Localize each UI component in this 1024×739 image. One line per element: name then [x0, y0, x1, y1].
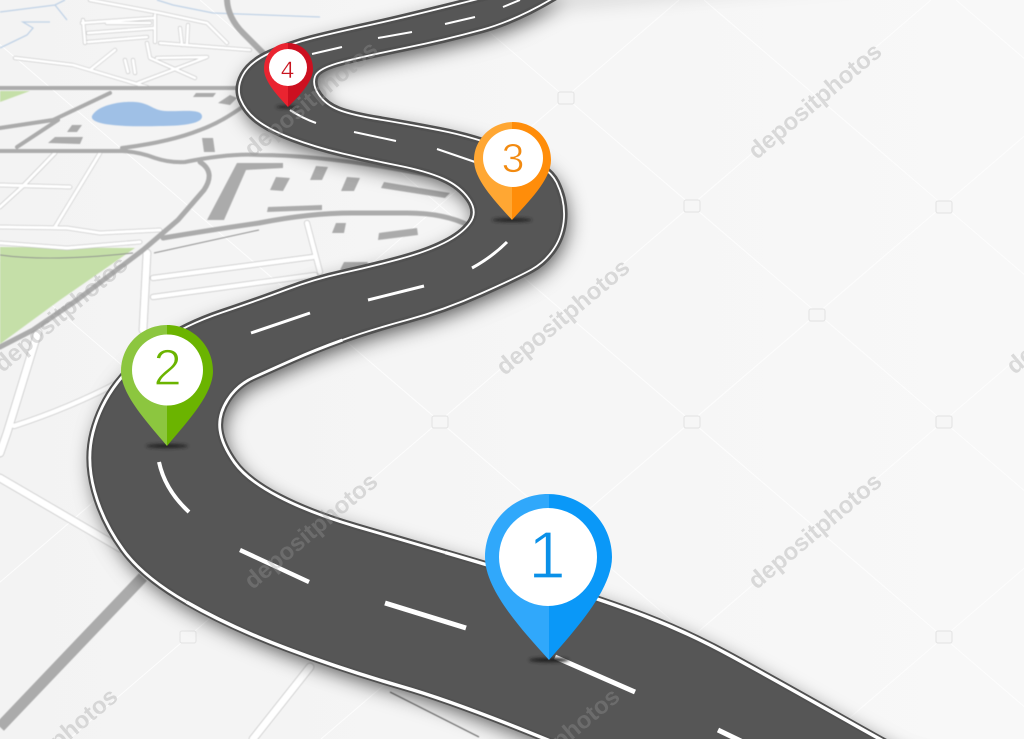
road white edge lines [90, 0, 900, 739]
pin 2 ground shadow [146, 444, 188, 448]
watermarks: depositphotos [239, 36, 383, 163]
pin 2 number: 2 [153, 339, 182, 396]
pin 3 ground shadow [492, 218, 532, 222]
pin 2 body [121, 325, 213, 446]
pin 1 body [485, 494, 612, 660]
pin 1 number: 1 [528, 518, 566, 593]
watermarks: depositphotos [491, 254, 635, 381]
watermarks: depositphotos [743, 468, 887, 595]
pin 1 number [499, 508, 597, 606]
watermarks: depositphotos [743, 38, 887, 165]
road centre dashes [159, 0, 745, 739]
pin 4 body [264, 43, 313, 107]
map: blue lake [92, 102, 202, 126]
watermarks: depositphotos [239, 468, 383, 595]
pin 2: green [121, 325, 213, 448]
pin 4 number: 4 [281, 57, 294, 84]
road dark curb [90, 0, 900, 739]
map: white streets [0, 0, 320, 739]
map: grey building blocks [48, 93, 450, 270]
pin 3 number: 3 [502, 135, 524, 181]
pin 1: blue [485, 494, 612, 662]
map: thin lines [0, 0, 479, 737]
map: grey roads [0, 0, 470, 727]
pin 3 body [474, 122, 551, 220]
map: green parks [0, 91, 135, 344]
pin 3: orange [474, 122, 551, 222]
pin 4: red [264, 43, 313, 109]
street map [0, 0, 479, 739]
camera watermark icons [180, 92, 952, 643]
pin 4 ground shadow [276, 105, 298, 109]
pin 1 ground shadow [529, 658, 569, 662]
